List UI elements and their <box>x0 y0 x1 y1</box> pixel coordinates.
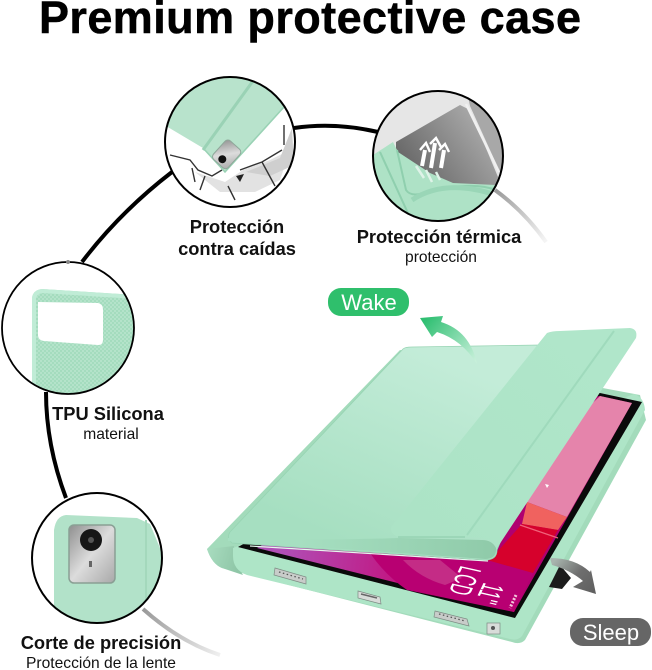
screen text: LCD <box>441 563 487 598</box>
sleep arrow <box>550 558 596 594</box>
left pocket <box>207 546 243 575</box>
flap roll shadow <box>228 538 496 559</box>
label: thermal protection: protección <box>405 249 477 266</box>
heat arrows <box>422 143 444 168</box>
back cover <box>207 350 646 643</box>
connector arc <box>46 126 546 655</box>
circle: drop protection <box>168 78 294 200</box>
camera <box>212 140 242 170</box>
front flap <box>228 345 560 560</box>
screen <box>257 396 632 612</box>
label: drop protection: contra caídas <box>178 238 296 259</box>
label: thermal protection <box>357 226 522 266</box>
circle: thermal protection <box>374 92 502 220</box>
label: drop protection <box>178 216 296 259</box>
grey tablet back <box>396 105 498 192</box>
label: TPU <box>52 403 165 443</box>
sleep button: Sleep <box>583 620 639 645</box>
cracked floor <box>170 125 294 200</box>
wake button <box>328 288 409 316</box>
circle: precise cutout <box>54 515 161 622</box>
label: TPU: material <box>83 426 139 443</box>
grey dot on ring <box>66 260 70 264</box>
tablet with case <box>207 328 646 643</box>
fold strip <box>391 328 636 548</box>
camera module <box>69 525 115 583</box>
ports <box>274 568 500 634</box>
inner tray <box>233 394 645 640</box>
circle: TPU material <box>32 289 134 394</box>
label: TPU: TPU Silicona <box>52 403 165 424</box>
label: thermal protection: Protección térmica <box>357 226 522 247</box>
sleep button <box>570 618 651 646</box>
wake arrow <box>420 316 477 364</box>
green case <box>168 78 284 171</box>
label: precise cutout: Corte de precisión <box>21 632 181 653</box>
wake button: Wake <box>341 290 397 315</box>
green case interior <box>374 142 495 220</box>
status icons <box>510 595 516 608</box>
flap white underline <box>250 546 488 561</box>
screen: 11" <box>468 580 510 607</box>
label: precise cutout <box>21 632 181 670</box>
label: drop protection: Protección <box>190 216 284 237</box>
sleep latch <box>549 565 571 589</box>
bezel <box>238 393 642 618</box>
